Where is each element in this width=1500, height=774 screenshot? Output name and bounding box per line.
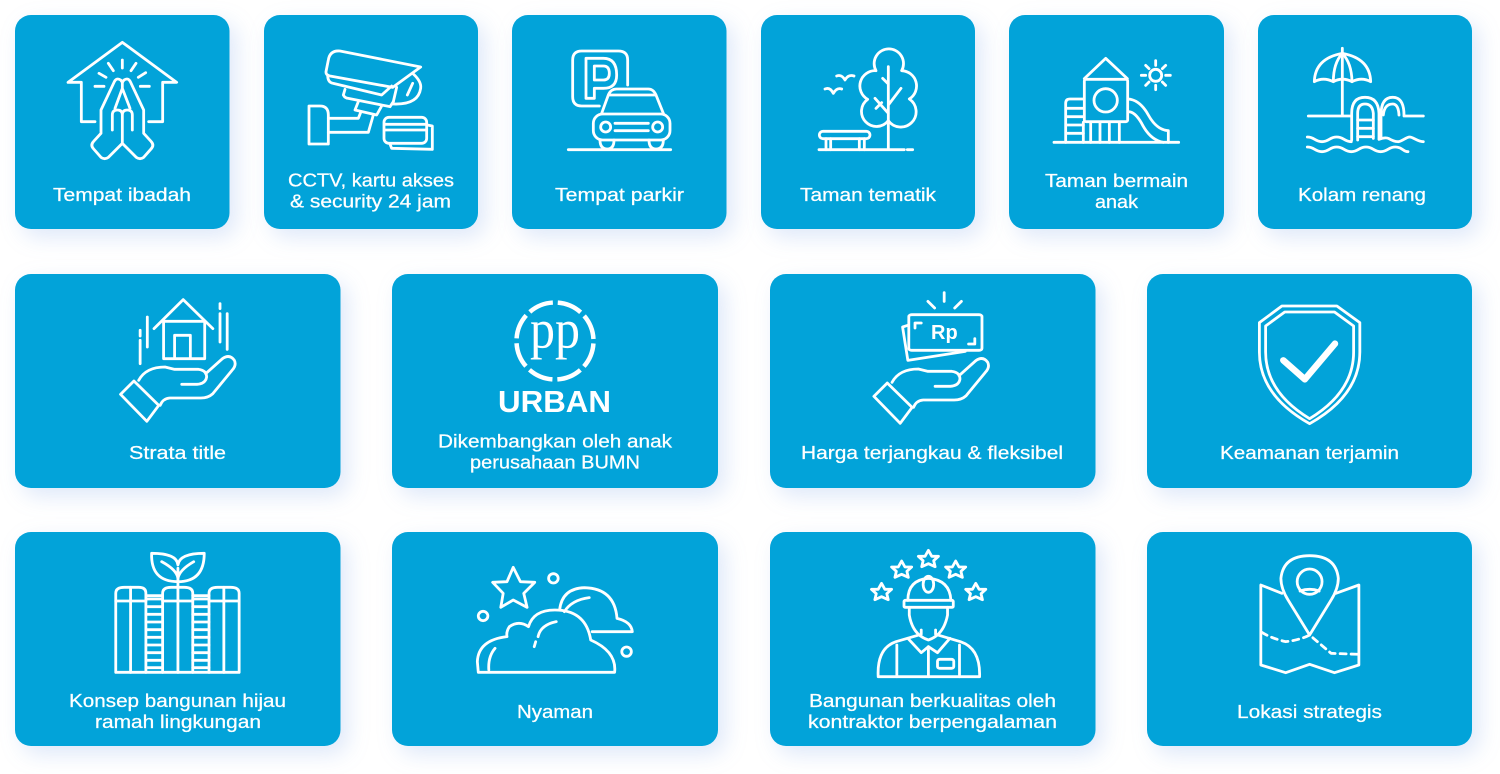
icon: praying hands in house [68,42,177,159]
logo: PP Urban: URBAN [498,384,611,419]
label line 2: kontraktor berpengalaman [808,712,1057,732]
panel: Lokasi [1147,532,1472,746]
panel: Nyaman [392,532,718,746]
label: Kolam renang [1298,185,1426,205]
icon: map with pin [1261,556,1359,673]
icon: umbrella and pool ladder [1307,48,1423,152]
label: Strata title [129,443,226,463]
label: Lokasi strategis [1237,702,1382,722]
label line 2: ramah lingkungan [95,712,261,732]
icon: star, moon and clouds [477,567,632,672]
icon: playground and sun [1054,58,1179,142]
label line 2: perusahaan BUMN [470,453,640,473]
label: Dikembangkan oleh anak [438,432,673,452]
icon: green building with sprout [116,553,239,672]
panel: Tempat parkir [512,15,726,229]
panel: CCTV [264,15,478,229]
panel: Taman bermain anak [1009,15,1224,229]
label: Konsep bangunan hijau [69,691,286,711]
panel: Harga [770,274,1096,488]
label: Taman bermain [1045,171,1188,191]
label: Nyaman [517,702,593,722]
panel: Keamanan [1147,274,1472,488]
panel: Konsep hijau [15,532,340,746]
rupiah mark: Rp [931,322,958,344]
panel: PP Urban [392,274,718,488]
panel: Taman tematik [761,15,975,229]
label: Harga terjangkau & fleksibel [801,443,1063,463]
label: Taman tematik [800,185,937,205]
label: Bangunan berkualitas oleh [809,691,1056,711]
icon: tree, bench and birds [819,49,917,150]
icon: worker with stars [871,550,986,677]
icon: house over hand [121,300,235,421]
label line 2: anak [1095,192,1139,212]
panel: Tempat ibadah [15,15,230,229]
label: Keamanan terjamin [1220,443,1399,463]
icon: shield with check [1259,306,1360,424]
logo: PP Urban [498,299,611,419]
label line 2: & security 24 jam [290,192,451,212]
panel: Strata title [15,274,340,488]
panel: Kolam renang [1258,15,1472,229]
logo: PP Urban: pp [530,299,580,360]
label: Tempat parkir [555,185,684,205]
icon: parking sign and car [568,51,671,150]
panel: Kontraktor [770,532,1096,746]
icon: money over hand [874,293,989,423]
icon: CCTV camera and access card [309,51,432,149]
label: CCTV, kartu akses [288,171,454,191]
label: Tempat ibadah [53,185,191,205]
